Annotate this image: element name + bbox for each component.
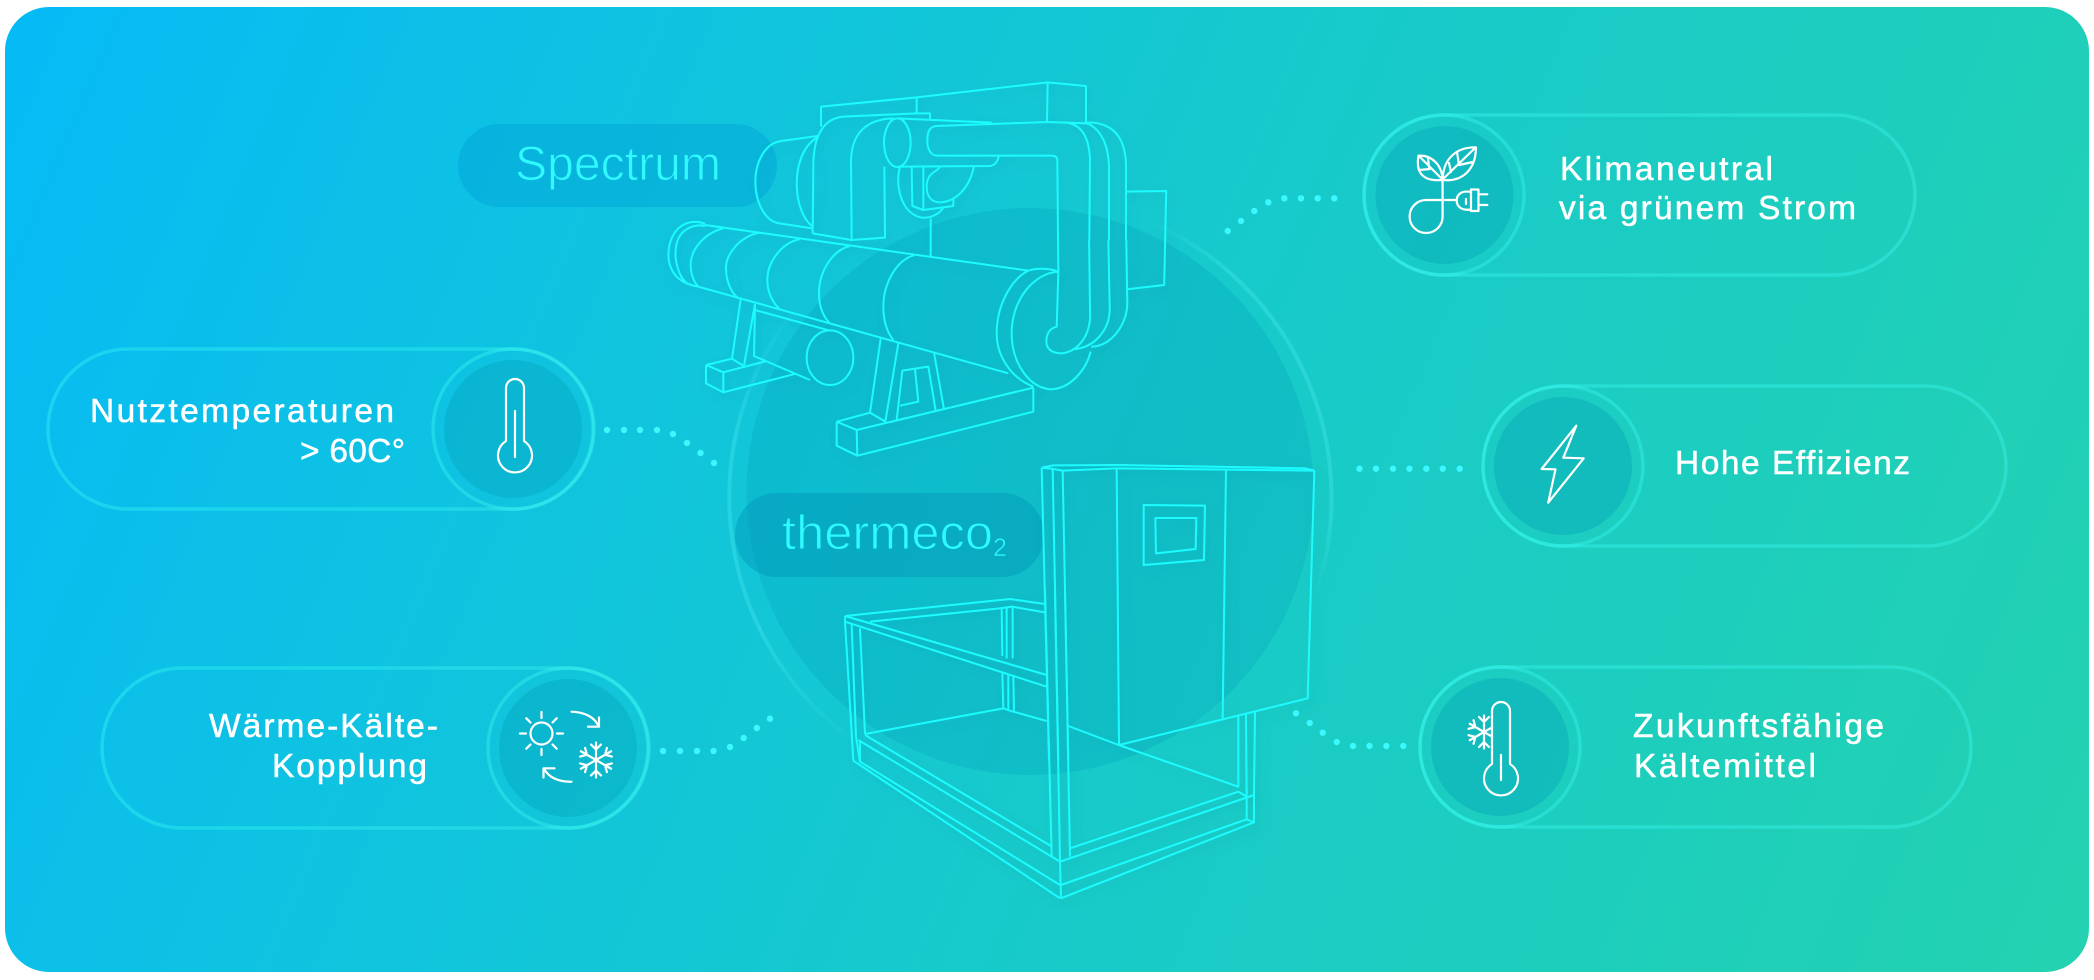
- feature: Zukunftsfähige Kältemittel: Kältemittel: [1634, 748, 1816, 785]
- feature: Wärme-Kälte-Kopplung: Kopplung: [272, 748, 427, 785]
- icon: plant with plug: [1410, 147, 1487, 233]
- label pill: thermeco2: [735, 493, 1044, 577]
- label pill: thermeco2: 2: [993, 534, 1007, 562]
- dotted connector: Hohe Effizienz: [1356, 466, 1463, 472]
- icon: sun, snowflake and arrows: [520, 712, 614, 782]
- feature: Wärme-Kälte-Kopplung: [102, 668, 649, 828]
- machine: Spectrum heat pump: [668, 82, 1166, 456]
- feature: Nutztemperaturen: > 60C°: [300, 433, 405, 470]
- dotted connector: Wärme-Kälte-Kopplung: [660, 716, 773, 754]
- feature: Zukunftsfähige Kältemittel: [1420, 667, 1971, 827]
- machine: thermeco2 unit: [845, 465, 1314, 898]
- feature: Nutztemperaturen: Nutztemperaturen: [90, 393, 394, 430]
- central circle: [729, 208, 1332, 775]
- icon: thermometer with snowflake: [1467, 702, 1518, 795]
- label pill: Spectrum: [458, 124, 777, 207]
- feature: Nutztemperaturen: [48, 349, 594, 509]
- feature: Klimaneutral via grünem Strom: Klimaneutral: [1560, 151, 1773, 188]
- label pill: thermeco2: thermeco: [782, 507, 993, 560]
- dotted connector: Klimaneutral: [1224, 195, 1338, 234]
- feature: Hohe Effizienz: Hohe Effizienz: [1675, 445, 1910, 482]
- icon: thermometer: [498, 379, 532, 472]
- icon: lightning bolt: [1542, 426, 1584, 503]
- label pill: Spectrum: Spectrum: [515, 138, 721, 191]
- dotted connector: Nutztemperaturen: [604, 427, 717, 466]
- feature: Klimaneutral via grünem Strom: via grünem Strom: [1559, 190, 1856, 227]
- feature: Wärme-Kälte-Kopplung: Wärme-Kälte-: [209, 708, 438, 745]
- feature: Zukunftsfähige Kältemittel: Zukunftsfähige: [1633, 708, 1884, 745]
- dotted connector: Zukunftsfähige Kältemittel: [1293, 710, 1407, 749]
- feature: Hohe Effizienz: [1483, 386, 2006, 546]
- feature: Klimaneutral via grünem Strom: [1364, 115, 1915, 275]
